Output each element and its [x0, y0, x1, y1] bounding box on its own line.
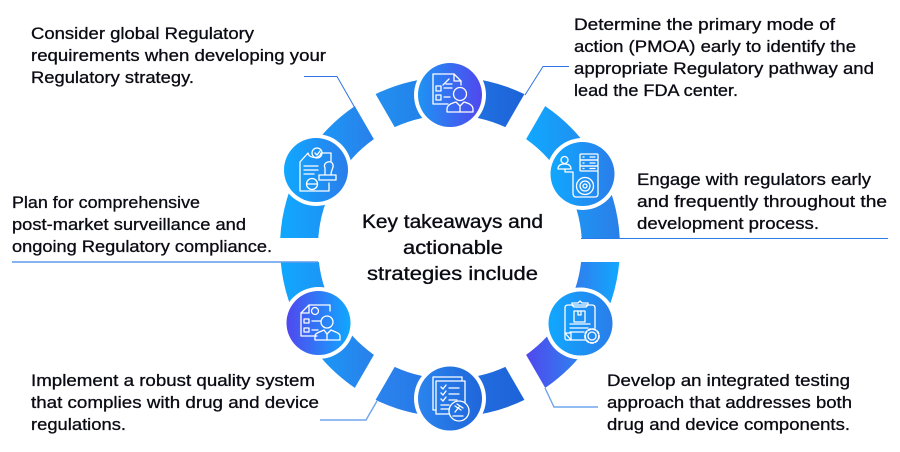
text block: global requirements: Consider global Regulatory	[31, 25, 255, 43]
text block: post-market surveillance: Plan for comprehensive	[12, 194, 200, 212]
icon: regulatory review, top	[414, 59, 486, 131]
heading: ring center title: Key takeaways and	[362, 212, 543, 233]
text block: global requirements: Regulatory strategy.	[31, 69, 194, 87]
text block: engage with regulators: and frequently throughout the	[637, 193, 887, 211]
heading: ring center title: strategies include	[367, 264, 538, 285]
text block: post-market surveillance: ongoing Regulatory compliance.	[12, 238, 272, 256]
text block: post-market surveillance: post-market surveillance and	[12, 216, 246, 234]
text block: quality system	[31, 372, 319, 434]
text block: engage with regulators	[637, 171, 887, 233]
segmented ring	[280, 77, 620, 417]
text block: quality system: that complies with drug and device	[31, 394, 319, 412]
leader lines	[12, 66, 888, 420]
text block: integrated testing: Develop an integrated testing	[607, 372, 850, 390]
text block: global requirements	[31, 25, 327, 87]
text block: primary mode of action: appropriate Regulatory pathway and	[574, 60, 874, 78]
text block: primary mode of action: lead the FDA center.	[574, 82, 738, 100]
icon: data server and settings, upper right	[546, 138, 618, 210]
text block: post-market surveillance	[12, 194, 272, 256]
text block: integrated testing	[607, 372, 852, 434]
text block: engage with regulators: Engage with regulators early	[637, 171, 872, 189]
text block: primary mode of action: Determine the primary mode of	[574, 16, 835, 34]
heading: ring center title	[362, 212, 543, 285]
text block: primary mode of action: action (PMOA) early to identify the	[574, 38, 856, 56]
icon: quality checklist and person, lower left	[282, 287, 354, 359]
text block: integrated testing: approach that addresses both	[607, 394, 852, 412]
icon: stamped document, upper left	[280, 134, 352, 206]
icon: documents and gavel, bottom	[414, 362, 486, 434]
text block: quality system: Implement a robust quality system	[31, 372, 315, 390]
text block: primary mode of action	[574, 16, 874, 100]
text block: global requirements: requirements when developing your	[31, 47, 327, 65]
text block: integrated testing: drug and device components.	[607, 416, 850, 434]
text block: quality system: regulations.	[31, 416, 126, 434]
icon: clipboard and gear, lower right	[544, 288, 616, 360]
heading: ring center title: actionable	[403, 238, 503, 259]
text block: engage with regulators: development process.	[637, 215, 819, 233]
